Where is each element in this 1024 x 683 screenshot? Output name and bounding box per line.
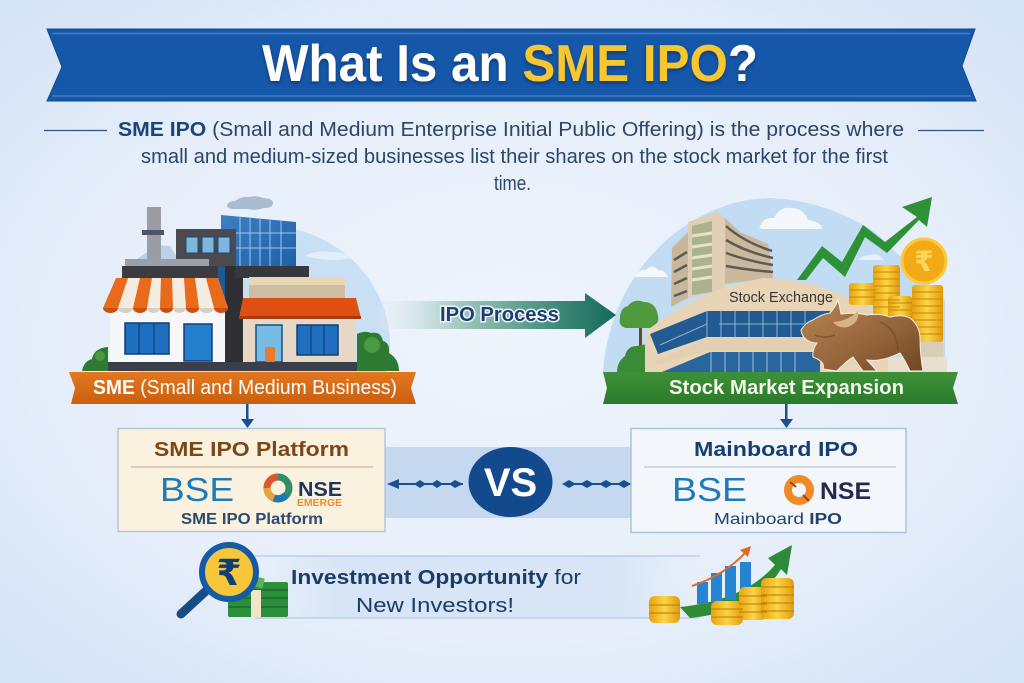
title banner: [47, 29, 976, 101]
chimney: [147, 207, 161, 262]
title: What Is an SME IPO?: [262, 35, 758, 93]
dark office block: [176, 229, 236, 279]
logo: NSE: NSE: [820, 478, 871, 505]
intro text: [44, 119, 984, 195]
intro text: time.: [494, 173, 531, 195]
icon: magnifying glass with rupee: [181, 545, 256, 614]
investment band: New Investors!: [356, 595, 514, 617]
investment text: Investment Opportunity for: [291, 567, 581, 589]
beige upper storey: [249, 277, 345, 285]
arrow: SME down: [241, 404, 254, 428]
arrow: IPO process: IPO Process: [440, 304, 559, 326]
logo: NSE Emerge: EMERGE: [297, 498, 342, 509]
orange ribbon: SME: [69, 372, 416, 404]
investment band: [255, 556, 700, 618]
logo: NSE: [788, 478, 871, 505]
logo: BSE: BSE: [160, 471, 234, 508]
glass tower: [221, 215, 296, 266]
logo: NSE Emerge: [267, 477, 342, 509]
icon: money stack: [228, 572, 288, 617]
bull: [801, 300, 923, 371]
exchange building: [645, 278, 888, 372]
label: SME IPO Platform: SME IPO Platform: [181, 511, 323, 528]
tower: [671, 212, 773, 307]
arrow: VS left: [387, 479, 463, 489]
rupee coin: [902, 239, 946, 283]
VS badge: [468, 447, 552, 517]
comparison band: [385, 447, 632, 518]
striped awning: [103, 278, 228, 313]
green ribbon: stock market: [603, 372, 958, 404]
heading: Mainboard IPO: Mainboard IPO: [694, 439, 858, 461]
illustration: SME buildings: [82, 196, 399, 372]
intro text: SME IPO (Small and Medium Enterprise Initial Public Offering) is the process where: [118, 119, 904, 141]
heading: SME IPO Platform: SME IPO Platform: [154, 439, 349, 461]
icon: magnifying glass with rupee: ₹: [216, 553, 242, 594]
panel: Mainboard IPO: [631, 428, 906, 532]
rupee coin: ₹: [914, 245, 934, 278]
trees: [617, 301, 665, 372]
panel: SME IPO platform: [118, 428, 385, 532]
intro text: small and medium-sized businesses list their shares on the stock market for the first: [141, 146, 888, 168]
arrow: stock market down: [780, 404, 793, 428]
logo: NSE Emerge: NSE: [298, 479, 342, 501]
VS badge: VS: [484, 461, 537, 505]
logo: BSE: BSE: [672, 471, 747, 508]
arrow: IPO process: [378, 293, 616, 338]
bushes: [82, 332, 399, 371]
growth arrow: [797, 197, 932, 280]
label: Mainboard IPO: Mainboard IPO: [714, 511, 842, 528]
beige shop: [244, 316, 355, 362]
green ribbon: stock market: Stock Market Expansion: [669, 377, 904, 399]
orange ribbon: SME: SME (Small and Medium Business): [93, 377, 397, 399]
illustration: stock exchange: [603, 197, 947, 372]
stock exchange sign: Stock Exchange: [729, 290, 833, 306]
coin stacks: [849, 265, 943, 342]
arrow: VS right: [562, 480, 631, 488]
icon: growth chart with coins: [649, 545, 794, 625]
white shop: [110, 310, 225, 362]
